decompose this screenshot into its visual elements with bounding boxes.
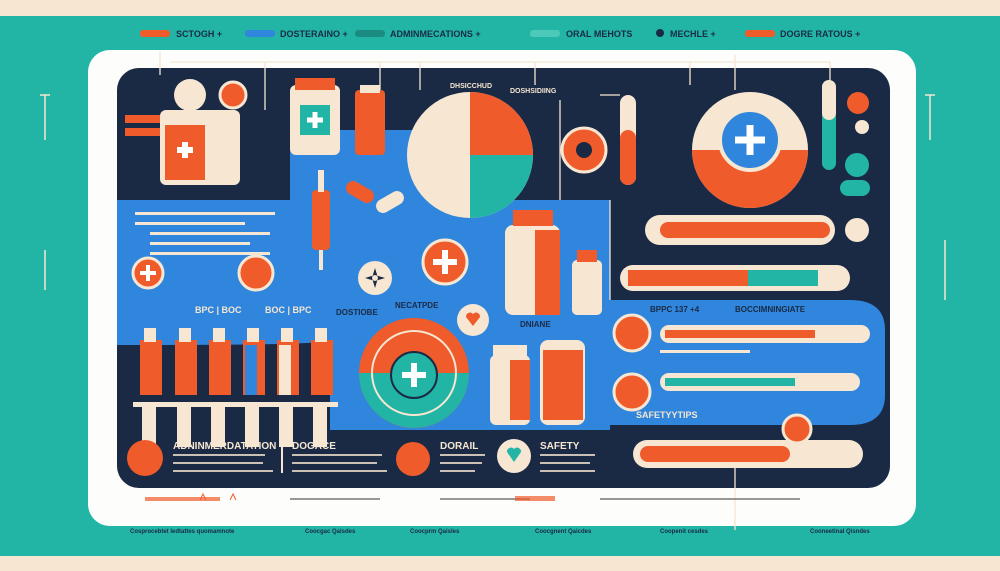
target circle (336, 301, 489, 428)
bottom vials: DNIANE (520, 320, 551, 329)
right blue band content: BPPC 137 +4 (650, 305, 700, 314)
bottom info row: DORAIL (440, 441, 478, 452)
safety tips: SAFETYYTIPS (636, 410, 698, 420)
top legend: SCTOGH + (176, 29, 222, 39)
top legend: ORAL MEHOTS (566, 29, 632, 39)
blue areas (117, 200, 610, 330)
bottom vials (490, 320, 585, 425)
target circle: DOSTIOBE (336, 308, 378, 317)
navy main panel (117, 68, 890, 488)
syringes row: BOC | BPC (265, 305, 312, 315)
vials center (505, 210, 602, 315)
footer marks: Coocprm Qaisles (410, 529, 460, 535)
top legend (140, 29, 860, 39)
bottom info row (127, 433, 595, 476)
target circle: NECATPDE (395, 301, 439, 310)
white frame (88, 50, 916, 526)
right top: test tubes & circle (562, 80, 870, 208)
bottom info row: SAFETY (540, 441, 580, 452)
pie chart (407, 83, 557, 218)
connector lines (130, 52, 830, 530)
syringes row (133, 305, 338, 447)
top-left bottle icon (125, 79, 246, 185)
top legend: ADMINMECATIONS + (390, 29, 481, 39)
safety tips (633, 410, 863, 468)
capsules (344, 178, 406, 216)
left text block (135, 212, 275, 255)
footer marks (130, 494, 870, 535)
horizontal syringes right (620, 215, 869, 291)
top legend: DOSTERAINO + (280, 29, 348, 39)
top legend: MECHLE + (670, 29, 716, 39)
right blue band content: BOCCIMNINGIATE (735, 305, 806, 314)
pie chart: DOSHSIDIING (510, 88, 557, 95)
side marks (40, 95, 945, 300)
footer marks: Coocgnent Qaicdes (535, 529, 592, 535)
right blue band content (614, 305, 870, 410)
footer marks: Coocgac Qaisdes (305, 529, 356, 535)
round icons row (133, 240, 467, 295)
syringes row: BPC | BOC (195, 305, 242, 315)
footer marks: Cosprocebtet ledtattes quomamnote (130, 529, 235, 535)
footer marks: Cooneetinal Qisndes (810, 529, 870, 535)
bottom info row: ADNINMERDATATION (173, 441, 276, 452)
pie chart: DHSICCHUD (450, 83, 492, 90)
top legend: DOGRE RATOUS + (780, 29, 860, 39)
bottom info row: DOGACE (292, 441, 336, 452)
footer marks: Coopenit cesdes (660, 529, 709, 535)
syringe vertical (312, 170, 330, 270)
jars top (290, 78, 385, 155)
